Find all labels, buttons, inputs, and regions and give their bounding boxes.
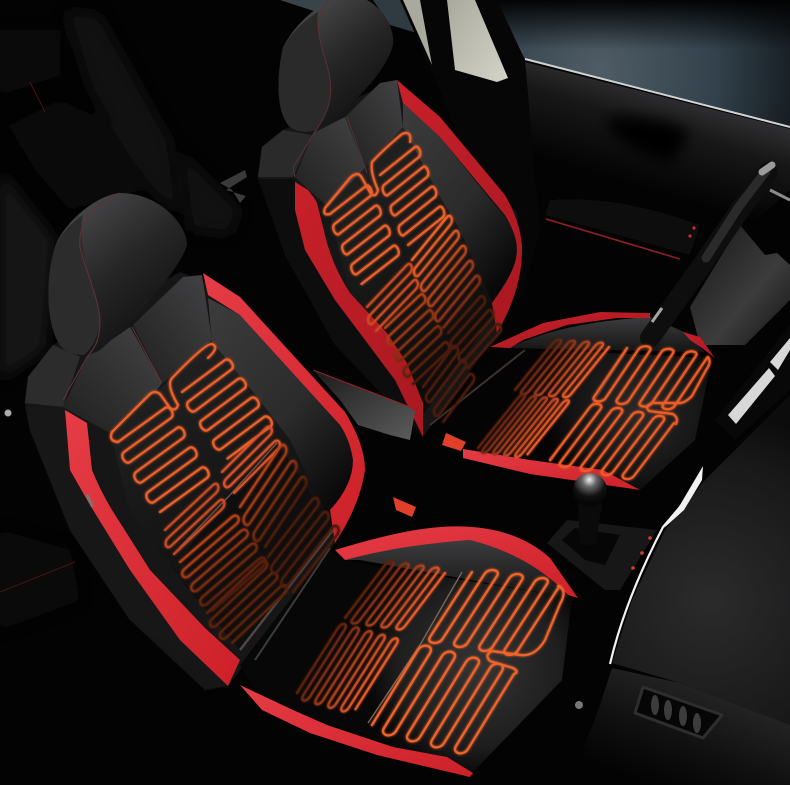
- wire coil left lower: [161, 482, 226, 557]
- door lower trim: [545, 199, 700, 255]
- seat base seam: [430, 350, 525, 425]
- air vent: [635, 687, 722, 738]
- door panel: [525, 59, 790, 310]
- driver seams: [293, 0, 367, 177]
- driver red trim left: [295, 182, 423, 437]
- seat back shell: [25, 272, 365, 690]
- wire coil left lower: [364, 262, 419, 334]
- wire coil below seam: [382, 293, 451, 386]
- driver headrest side: [279, 12, 331, 132]
- driver seat shell: [258, 80, 522, 437]
- driver upper left panel: [295, 117, 367, 207]
- window ledge highlight: [525, 59, 790, 127]
- headrest: [48, 193, 187, 354]
- rear seat stitch: [30, 82, 45, 112]
- dash white edge: [610, 507, 680, 664]
- heating wires: driver seat back: [324, 133, 502, 425]
- cushion top panel: [345, 540, 570, 598]
- red trim right: [203, 273, 365, 543]
- seat buckle: [220, 170, 247, 203]
- console buttons: [631, 536, 652, 570]
- wire coil far right: [446, 294, 502, 371]
- seams: [63, 193, 162, 400]
- wire connector top: [111, 344, 215, 442]
- driver upper right panel: [345, 80, 403, 173]
- red side trim: [683, 332, 715, 358]
- wire coil front right: [547, 403, 677, 480]
- pillar light strip: [403, 0, 432, 65]
- steering column shroud: [690, 190, 790, 345]
- upper left panel: [63, 327, 162, 433]
- seam highlight: [180, 443, 277, 547]
- wire coil center: [219, 425, 281, 496]
- dash white edge wide: [664, 466, 703, 528]
- shifter shaft: [578, 500, 602, 545]
- driver headrest: [279, 0, 393, 132]
- wire connector: [647, 357, 710, 424]
- passenger seat: [25, 193, 365, 690]
- red trim left: [65, 410, 240, 686]
- side window: [495, 0, 790, 127]
- left bolster: [25, 406, 228, 686]
- side sill icon: [4, 410, 12, 416]
- wire coil lower: [421, 344, 475, 425]
- red top trim: [335, 526, 578, 598]
- shifter boot console: [547, 520, 657, 590]
- red top trim: [490, 312, 650, 348]
- rear side window strip: [280, 0, 335, 13]
- dashboard: [570, 395, 790, 785]
- window top shade: [495, 0, 790, 127]
- driver seat: [258, 0, 522, 437]
- lower back panel: [180, 443, 333, 650]
- wire coil upper left: [114, 405, 211, 515]
- driver seat cushion: [430, 312, 715, 490]
- wire coil upper left: [327, 184, 400, 286]
- small fastener: [575, 701, 583, 709]
- wire coil front left: [475, 394, 570, 458]
- wire coil back left: [512, 339, 612, 398]
- dash top: [612, 395, 790, 725]
- door handle recess: [606, 116, 690, 165]
- seat belt buckle front: [393, 497, 416, 517]
- wire coil front right: [369, 644, 517, 755]
- driver red trim right: [397, 80, 522, 333]
- base fold: [240, 530, 333, 650]
- wire coil front left: [294, 623, 400, 714]
- door switch dots: [688, 226, 696, 238]
- cushion center seam: [550, 350, 627, 462]
- headrest side: [48, 215, 100, 355]
- wire coil right lower: [237, 442, 308, 552]
- heating wires: driver seat cushion: [475, 339, 710, 480]
- seat belt buckle: [442, 433, 466, 451]
- center console: [393, 433, 657, 590]
- center panel: [110, 342, 333, 650]
- red front trim: [463, 449, 640, 490]
- driver right bolster: [403, 103, 517, 303]
- upper right panel: [133, 275, 212, 383]
- rear bench seat: [0, 10, 247, 630]
- silver trim bar: [715, 325, 790, 440]
- wire coil far lower right: [265, 496, 340, 596]
- B pillar: [400, 0, 540, 300]
- seat side tag: [86, 494, 94, 507]
- wire coil lower: [203, 559, 289, 647]
- wire coil upper right: [179, 358, 274, 461]
- armrest: [313, 370, 415, 440]
- red door stitch: [546, 219, 680, 259]
- wire coil back right: [592, 344, 710, 410]
- wire coil right: [409, 214, 481, 331]
- shoulder panel: [25, 345, 80, 407]
- wire coil back right: [427, 567, 563, 656]
- right bolster: [208, 298, 355, 527]
- dash lower: [570, 668, 790, 785]
- seat belt: [0, 125, 65, 232]
- wire connector top: [324, 133, 410, 214]
- wire coil back left: [342, 561, 448, 630]
- pillar light trim: [447, 0, 508, 82]
- driver center panel: [328, 127, 495, 415]
- red front trim: [240, 685, 473, 777]
- driver left bolster: [258, 179, 423, 437]
- cushion center seam: [368, 572, 462, 723]
- wire connector: [487, 586, 564, 674]
- heating wires: passenger seat back: [111, 344, 340, 647]
- wire coil upper right: [377, 145, 446, 247]
- shifter knob: [573, 473, 607, 507]
- passenger seat cushion: [240, 526, 578, 777]
- wire coil below seam: [176, 514, 267, 614]
- heating wires: passenger seat cushion: [294, 561, 564, 755]
- steering wheel: [650, 165, 772, 338]
- driver shoulder: [258, 130, 312, 177]
- outer sill stitch: [0, 562, 75, 592]
- cushion side seam: [255, 548, 330, 660]
- window behind headrest: [373, 0, 417, 33]
- cushion top panel: [505, 317, 705, 352]
